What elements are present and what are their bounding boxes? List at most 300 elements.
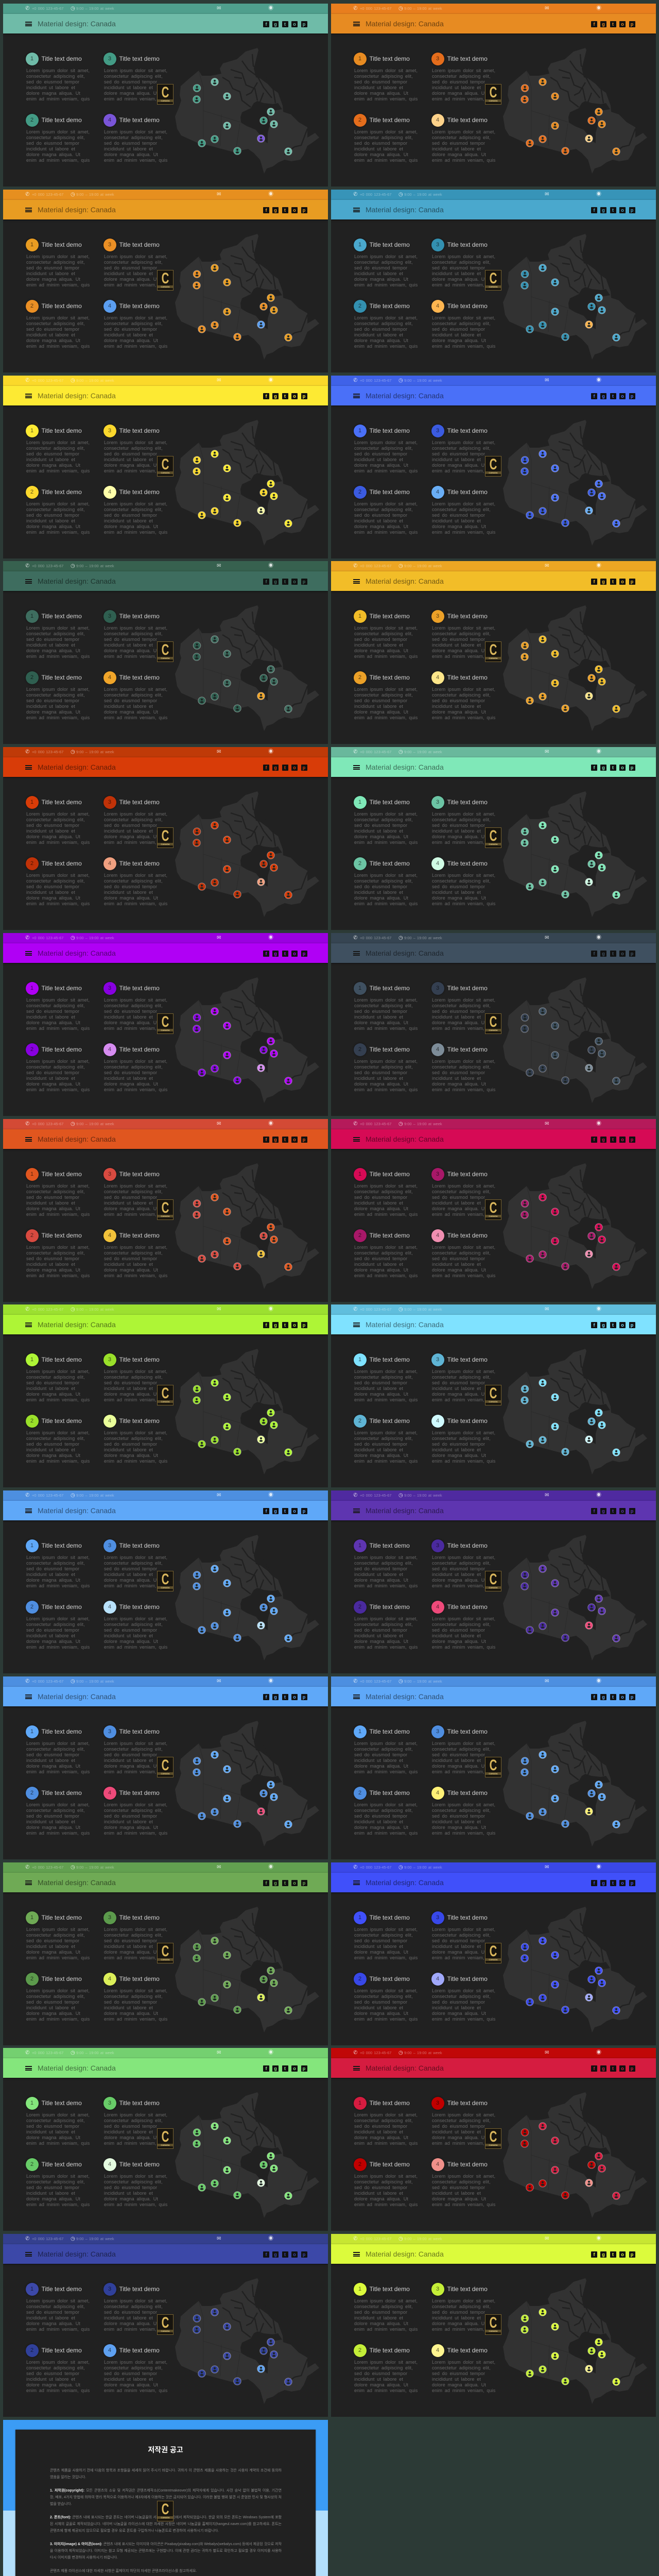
contact bar: ◉ — [596, 378, 601, 383]
item 1: Title text demo — [41, 1728, 82, 1735]
item 1 — [26, 1725, 103, 1776]
header bar: p — [303, 1137, 305, 1142]
item 2: sed do eiusmod tempor — [26, 1256, 79, 1261]
item 4: 4 — [108, 303, 111, 309]
contact bar: 9:00 – 19:00 at week — [404, 378, 442, 383]
item 1: Title text demo — [41, 1541, 82, 1549]
item 2: consectetur adipiscing elit, — [354, 507, 413, 512]
item 3: Lorem ipsum dolor sit amet, — [432, 1740, 495, 1745]
item 1: sed do eiusmod tempor — [354, 1380, 407, 1385]
item 1: consectetur adipiscing elit, — [354, 2304, 413, 2309]
item 4: 4 — [108, 674, 111, 681]
header bar: t — [284, 579, 286, 584]
header bar: f — [593, 208, 595, 213]
item 4: Lorem ipsum dolor sit amet, — [432, 1616, 495, 1621]
item 4: enim ad minim veniam, quis — [104, 1273, 167, 1278]
item 4: incididunt ut labore et — [104, 2377, 153, 2382]
panel: royal blue slide — [331, 376, 656, 558]
item 4: Title text demo — [447, 116, 488, 124]
header bar: p — [631, 394, 633, 399]
panel: lime slide — [3, 1304, 328, 1487]
item 2: sed do eiusmod tempor — [354, 698, 407, 703]
item 3: 3 — [436, 1356, 439, 1362]
item 2: 2 — [358, 489, 361, 495]
header bar: Material design: Canada — [38, 1878, 116, 1887]
item 4: sed do eiusmod tempor — [432, 2185, 485, 2190]
item 1: 1 — [30, 613, 33, 619]
contact bar: ◷ — [398, 749, 403, 755]
panel: teal slide — [3, 4, 328, 187]
panel: golden slide — [331, 561, 656, 744]
panel: dark green slide — [3, 561, 328, 744]
item 2: Lorem ipsum dolor sit amet, — [354, 1059, 418, 1064]
item 2: enim ad minim veniam, quis — [354, 344, 418, 349]
item 3: sed do eiusmod tempor — [104, 1752, 157, 1757]
item 3 — [431, 2282, 509, 2334]
item 4: consectetur adipiscing elit, — [104, 135, 163, 140]
header bar: o — [621, 2066, 624, 2071]
contact bar: ✉ — [217, 1679, 221, 1684]
item 4: dolore magna aliqua. Ut — [104, 1081, 158, 1087]
item 4: incididunt ut labore et — [432, 1262, 481, 1267]
logo badge: CANADA — [489, 2144, 498, 2146]
item 4: dolore magna aliqua. Ut — [104, 1825, 158, 1830]
item 4: 4 — [108, 117, 111, 123]
panel: deep purple slide — [331, 1490, 656, 1673]
item 2: 2 — [30, 1418, 33, 1424]
item 3: dolore magna aliqua. Ut — [432, 276, 486, 281]
item 2: dolore magna aliqua. Ut — [26, 2011, 80, 2016]
item 4: Lorem ipsum dolor sit amet, — [432, 1802, 495, 1807]
item 2: sed do eiusmod tempor — [354, 2371, 407, 2376]
contact bar: ✆ — [25, 563, 29, 569]
item 4: enim ad minim veniam, quis — [104, 2388, 167, 2393]
item 4: incididunt ut labore et — [104, 1633, 153, 1638]
item 1: incididunt ut labore et — [26, 2129, 75, 2134]
notice body text: 콘텐츠에 함께 제공되지 않으므로 필요할 경우 유료 폰트를 구입하거나 나눔폰트로 변경하여 사용하시기 바랍니다. — [50, 2529, 219, 2533]
contact bar: 9:00 – 19:00 at week — [404, 6, 442, 11]
header bar — [331, 200, 656, 219]
item 3: Title text demo — [119, 2285, 160, 2293]
contact bar: ✉ — [545, 378, 549, 383]
logo badge — [485, 1013, 501, 1034]
item 2: enim ad minim veniam, quis — [354, 158, 418, 163]
item 4: sed do eiusmod tempor — [104, 1628, 157, 1633]
contact bar: ✉ — [217, 378, 221, 383]
contact bar — [331, 190, 656, 200]
item 2: enim ad minim veniam, quis — [26, 1645, 90, 1650]
item 2: sed do eiusmod tempor — [354, 884, 407, 889]
header bar: Material design: Canada — [366, 1320, 444, 1329]
item 2: enim ad minim veniam, quis — [26, 901, 90, 906]
item 1: consectetur adipiscing elit, — [354, 631, 413, 636]
notice body text: 2. 폰트(font): 콘텐츠 내에 표시되는 한글 폰트는 네이버 나눔글꼴의 서체(나눔고딕)에서 제작되었습니다. 한글 외의 모든 폰트는 Windows System에 포함 — [50, 2515, 282, 2519]
item 1: incididunt ut labore et — [354, 2129, 403, 2134]
notice body text: 콘텐츠 제품을 사용하기 전에 다음의 항목과 조항들을 세세히 읽어 주시기 바랍니다. 귀하가 이 콘텐츠 제품을 사용하는 것은 사용자 계약의 조건에 동의하 — [50, 2469, 282, 2472]
item 4: consectetur adipiscing elit, — [104, 1064, 163, 1070]
item 4: 4 — [108, 2347, 111, 2353]
item 4: Title text demo — [447, 1417, 488, 1425]
item 1 — [353, 238, 430, 290]
logo badge: CANADA — [489, 1029, 498, 1031]
item 2: dolore magna aliqua. Ut — [354, 338, 408, 343]
item 2: 2 — [358, 1976, 361, 1982]
logo badge — [157, 1571, 174, 1591]
logo badge — [157, 1199, 174, 1220]
item 1: Title text demo — [370, 799, 410, 806]
contact bar: ◉ — [268, 6, 273, 11]
item 1: 1 — [358, 1356, 361, 1362]
item 2: 2 — [30, 1790, 33, 1796]
header bar: Material design: Canada — [38, 577, 116, 585]
item 4: incididunt ut labore et — [432, 518, 481, 523]
item 3: sed do eiusmod tempor — [104, 1566, 157, 1571]
contact bar: 9:00 – 19:00 at week — [76, 1493, 114, 1498]
item 1 — [26, 1167, 103, 1219]
item 3: sed do eiusmod tempor — [104, 1194, 157, 1199]
item 3: Title text demo — [119, 1171, 160, 1178]
item 4: 4 — [108, 1976, 111, 1982]
item 2: sed do eiusmod tempor — [26, 2185, 79, 2190]
contact bar: ✆ — [353, 1121, 357, 1127]
contact bar: 9:00 – 19:00 at week — [404, 750, 442, 754]
item 2 — [354, 114, 418, 163]
item 1: 1 — [30, 1914, 33, 1921]
item 3: 3 — [108, 241, 111, 247]
item 1: consectetur adipiscing elit, — [354, 2117, 413, 2123]
item 3: Title text demo — [447, 2285, 488, 2293]
item 1: 1 — [30, 2285, 33, 2292]
item 1: Title text demo — [370, 1913, 410, 1921]
item 3: sed do eiusmod tempor — [104, 1380, 157, 1385]
item 4: sed do eiusmod tempor — [432, 513, 485, 518]
item 1: dolore magna aliqua. Ut — [354, 1950, 408, 1955]
item 1: Lorem ipsum dolor sit amet, — [26, 440, 90, 445]
item 3: enim ad minim veniam, quis — [104, 1212, 167, 1217]
contact bar: ✉ — [217, 1121, 221, 1127]
item 2: Lorem ipsum dolor sit amet, — [26, 315, 90, 320]
item 1: Lorem ipsum dolor sit amet, — [354, 253, 418, 259]
header bar: p — [631, 951, 633, 956]
item 2: sed do eiusmod tempor — [26, 1814, 79, 1819]
item 1: Title text demo — [41, 1171, 82, 1178]
contact bar — [3, 1676, 328, 1687]
logo badge: C — [490, 2128, 497, 2145]
contact bar: +0 000 123-45-67 — [32, 564, 63, 568]
map with location markers — [175, 48, 319, 173]
item 3: 3 — [108, 1914, 111, 1921]
item 4: Title text demo — [119, 1046, 160, 1053]
logo badge — [485, 84, 501, 105]
item 1 — [353, 795, 430, 847]
item 4: dolore magna aliqua. Ut — [432, 2196, 486, 2201]
header bar: t — [612, 2066, 614, 2071]
item 1 — [26, 982, 103, 1033]
header bar — [331, 1873, 656, 1892]
item 2: dolore magna aliqua. Ut — [26, 1453, 80, 1458]
item 4: sed do eiusmod tempor — [104, 513, 157, 518]
item 2: sed do eiusmod tempor — [354, 1070, 407, 1075]
header bar: p — [631, 208, 633, 213]
item 4: enim ad minim veniam, quis — [432, 901, 495, 906]
header bar: t — [612, 1694, 614, 1700]
header bar: p — [303, 22, 305, 27]
item 2 — [26, 1601, 103, 1652]
header bar: o — [293, 951, 296, 956]
header bar: o — [621, 2252, 624, 2257]
header bar: Material design: Canada — [38, 949, 116, 957]
item 4: enim ad minim veniam, quis — [104, 344, 167, 349]
item 3 — [103, 2282, 180, 2334]
item 3: sed do eiusmod tempor — [432, 1009, 485, 1014]
contact bar: +0 000 123-45-67 — [32, 192, 63, 197]
item 3: consectetur adipiscing elit, — [104, 260, 163, 265]
item 2: dolore magna aliqua. Ut — [26, 338, 80, 343]
item 4: incididunt ut labore et — [432, 1447, 481, 1452]
item 4: Title text demo — [119, 2161, 160, 2168]
notice body text: 콘텐츠 제품 라이선스에 대한 자세한 사항은 홈페이지 하단의 자세한 콘텐츠라이선스를 참고하세요. — [50, 2569, 197, 2573]
item 2: 2 — [30, 2347, 33, 2353]
contact bar — [331, 4, 656, 14]
item 4: Title text demo — [447, 1603, 488, 1611]
item 2: Lorem ipsum dolor sit amet, — [26, 1059, 90, 1064]
item 2: consectetur adipiscing elit, — [354, 1622, 413, 1627]
header bar — [3, 571, 328, 591]
header bar: o — [293, 1880, 296, 1886]
item 1: dolore magna aliqua. Ut — [26, 1578, 80, 1583]
item 1: Title text demo — [370, 1356, 410, 1363]
notice body text: 였음을 알리는 것입니다. — [50, 2475, 86, 2479]
item 2: sed do eiusmod tempor — [26, 327, 79, 332]
logo badge — [485, 827, 501, 848]
item 2 — [353, 1787, 430, 1838]
notice body text: 1. 저작권(copyright): 모든 콘텐츠의 소유 및 저작권은 콘텐츠제작소(Contentmakeover)의 제작자에게 있습니다. 사전 승낙 없이 불법적 이용, 기간연 — [50, 2488, 282, 2493]
item 3: Title text demo — [447, 1356, 488, 1363]
item 3: sed do eiusmod tempor — [104, 79, 157, 84]
item 4: consectetur adipiscing elit, — [104, 2179, 163, 2184]
item 2: dolore magna aliqua. Ut — [26, 895, 80, 901]
item 4: 4 — [436, 2161, 439, 2167]
panel: blue grey slide — [331, 933, 656, 1116]
header bar: Material design: Canada — [366, 577, 444, 585]
contact bar: ✉ — [217, 563, 221, 569]
item 3: enim ad minim veniam, quis — [432, 1769, 495, 1774]
item 4: Lorem ipsum dolor sit amet, — [104, 1616, 167, 1621]
item 3 — [103, 982, 180, 1033]
item 2: incididunt ut labore et — [354, 1076, 403, 1081]
item 1: dolore magna aliqua. Ut — [354, 1391, 408, 1396]
item 3: Lorem ipsum dolor sit amet, — [432, 1555, 495, 1560]
contact bar: +0 000 123-45-67 — [360, 1122, 391, 1126]
item 3: enim ad minim veniam, quis — [104, 1397, 167, 1402]
item 4: sed do eiusmod tempor — [432, 327, 485, 332]
contact bar: ◷ — [71, 1307, 75, 1312]
item 1: consectetur adipiscing elit, — [26, 2304, 85, 2309]
contact bar: ◷ — [71, 749, 75, 755]
header bar: o — [621, 1694, 624, 1700]
map with location markers — [3, 2048, 328, 2231]
notice body text — [50, 2467, 282, 2574]
item 3: consectetur adipiscing elit, — [432, 631, 491, 636]
item 2: 2 — [358, 303, 361, 309]
logo badge: C — [490, 641, 497, 658]
item 2: dolore magna aliqua. Ut — [26, 1825, 80, 1830]
header bar: f — [593, 394, 595, 399]
item 2: incididunt ut labore et — [354, 704, 403, 709]
item 3 — [103, 1353, 180, 1404]
item 3: enim ad minim veniam, quis — [104, 1955, 167, 1960]
item 2: consectetur adipiscing elit, — [354, 692, 413, 698]
item 4: 4 — [436, 674, 439, 681]
contact bar: 9:00 – 19:00 at week — [76, 378, 114, 383]
logo badge — [157, 641, 174, 662]
contact bar: ✉ — [545, 1493, 549, 1498]
item 3 — [103, 610, 180, 662]
item 3: sed do eiusmod tempor — [104, 637, 157, 642]
header bar: p — [631, 765, 633, 770]
item 1: 1 — [358, 799, 361, 805]
item 3: sed do eiusmod tempor — [104, 1009, 157, 1014]
map with location markers — [331, 1862, 656, 2045]
header bar — [331, 943, 656, 963]
item 4 — [103, 2158, 180, 2210]
item 3: consectetur adipiscing elit, — [432, 1932, 491, 1937]
item 1: Lorem ipsum dolor sit amet, — [26, 1183, 90, 1188]
item 2: Title text demo — [370, 302, 410, 310]
item 2: consectetur adipiscing elit, — [26, 1994, 85, 1999]
item 2: 2 — [358, 1232, 361, 1239]
item 4: 4 — [436, 117, 439, 123]
item 2: incididunt ut labore et — [354, 2377, 403, 2382]
map with location markers — [3, 933, 328, 1116]
header bar: f — [266, 951, 267, 956]
item 1: sed do eiusmod tempor — [354, 1752, 407, 1757]
contact bar: ◉ — [268, 1679, 273, 1684]
item 1: Title text demo — [370, 612, 410, 619]
item 1: Lorem ipsum dolor sit amet, — [354, 2298, 418, 2303]
item 3: consectetur adipiscing elit, — [104, 1747, 163, 1752]
header bar: t — [284, 1137, 286, 1142]
contact bar: +0 000 123-45-67 — [360, 378, 391, 383]
logo badge — [157, 1385, 174, 1405]
contact bar — [331, 933, 656, 943]
header bar: Material design: Canada — [38, 1320, 116, 1329]
contact bar: 9:00 – 19:00 at week — [76, 936, 114, 940]
item 3: 3 — [436, 985, 439, 991]
header bar — [3, 1687, 328, 1706]
item 1: Title text demo — [41, 612, 82, 619]
contact bar: ◷ — [398, 563, 403, 569]
header bar: p — [631, 1137, 633, 1142]
item 1: dolore magna aliqua. Ut — [354, 1206, 408, 1211]
item 1: sed do eiusmod tempor — [354, 2124, 407, 2129]
header bar: Material design: Canada — [38, 1506, 116, 1515]
item 1: Lorem ipsum dolor sit amet, — [354, 1368, 418, 1374]
item 3: incididunt ut labore et — [432, 1943, 481, 1948]
item 4: dolore magna aliqua. Ut — [432, 1639, 486, 1644]
panel: sky blue slide — [331, 190, 656, 372]
panel: yellow-lime slide — [331, 2234, 656, 2417]
item 1: sed do eiusmod tempor — [26, 637, 79, 642]
item 1: consectetur adipiscing elit, — [26, 817, 85, 822]
item 3: incididunt ut labore et — [104, 1014, 153, 1019]
header bar: f — [593, 1509, 595, 1514]
item 1: incididunt ut labore et — [26, 1571, 75, 1577]
item 2 — [353, 1415, 430, 1466]
item 1: consectetur adipiscing elit, — [354, 817, 413, 822]
item 3: Title text demo — [119, 612, 160, 619]
item 2: enim ad minim veniam, quis — [354, 1831, 418, 1836]
header bar — [3, 757, 328, 777]
item 4: sed do eiusmod tempor — [104, 2185, 157, 2190]
contact bar — [331, 1862, 656, 1873]
item 3: dolore magna aliqua. Ut — [432, 648, 486, 653]
contact bar: ◉ — [268, 1865, 273, 1870]
header bar: f — [266, 1137, 267, 1142]
item 4: 4 — [108, 2161, 111, 2167]
header bar: f — [266, 1880, 267, 1886]
header bar: f — [266, 2066, 267, 2071]
item 1: sed do eiusmod tempor — [26, 451, 79, 456]
item 2: dolore magna aliqua. Ut — [26, 709, 80, 715]
logo badge: C — [490, 2314, 497, 2331]
item 4: dolore magna aliqua. Ut — [104, 2196, 158, 2201]
item 2: Title text demo — [41, 1232, 82, 1239]
item 3: incididunt ut labore et — [104, 1386, 153, 1391]
item 1: incididunt ut labore et — [26, 1386, 75, 1391]
item 1: dolore magna aliqua. Ut — [354, 2320, 408, 2326]
item 1: Lorem ipsum dolor sit amet, — [354, 2112, 418, 2117]
item 3: consectetur adipiscing elit, — [432, 817, 491, 822]
header bar: f — [266, 1694, 267, 1700]
contact bar: ◷ — [398, 935, 403, 941]
item 1: consectetur adipiscing elit, — [26, 1560, 85, 1565]
item 2: Lorem ipsum dolor sit amet, — [354, 2360, 418, 2365]
item 4: Title text demo — [447, 1789, 488, 1797]
item 3 — [431, 610, 509, 662]
item 3: Lorem ipsum dolor sit amet, — [432, 253, 495, 259]
item 4 — [103, 1043, 180, 1095]
contact bar: ◷ — [398, 2050, 403, 2056]
logo badge — [485, 1943, 501, 1963]
item 4: Lorem ipsum dolor sit amet, — [104, 2360, 167, 2365]
header bar: t — [284, 22, 286, 27]
item 3: 3 — [108, 1543, 111, 1549]
header bar: o — [293, 208, 296, 213]
item 2: sed do eiusmod tempor — [26, 513, 79, 518]
item 3: consectetur adipiscing elit, — [432, 2117, 491, 2123]
item 1: sed do eiusmod tempor — [26, 2124, 79, 2129]
item 3: Lorem ipsum dolor sit amet, — [104, 2112, 167, 2117]
item 3: dolore magna aliqua. Ut — [104, 91, 158, 96]
header bar: o — [293, 2066, 296, 2071]
item 4: consectetur adipiscing elit, — [432, 1808, 491, 1813]
item 2: consectetur adipiscing elit, — [354, 2179, 413, 2184]
item 1 — [353, 1725, 430, 1776]
logo badge — [157, 270, 174, 291]
contact bar: ✆ — [353, 749, 357, 755]
item 4: Title text demo — [119, 860, 160, 867]
header bar: t — [612, 394, 614, 399]
item 1: Title text demo — [41, 984, 82, 991]
item 3 — [103, 239, 167, 287]
item 4: Lorem ipsum dolor sit amet, — [104, 1059, 167, 1064]
item 4: dolore magna aliqua. Ut — [432, 338, 486, 343]
item 4 — [103, 2344, 180, 2396]
item 1: 1 — [30, 241, 33, 247]
contact bar: ◉ — [268, 378, 273, 383]
contact bar: ✆ — [353, 1865, 357, 1870]
